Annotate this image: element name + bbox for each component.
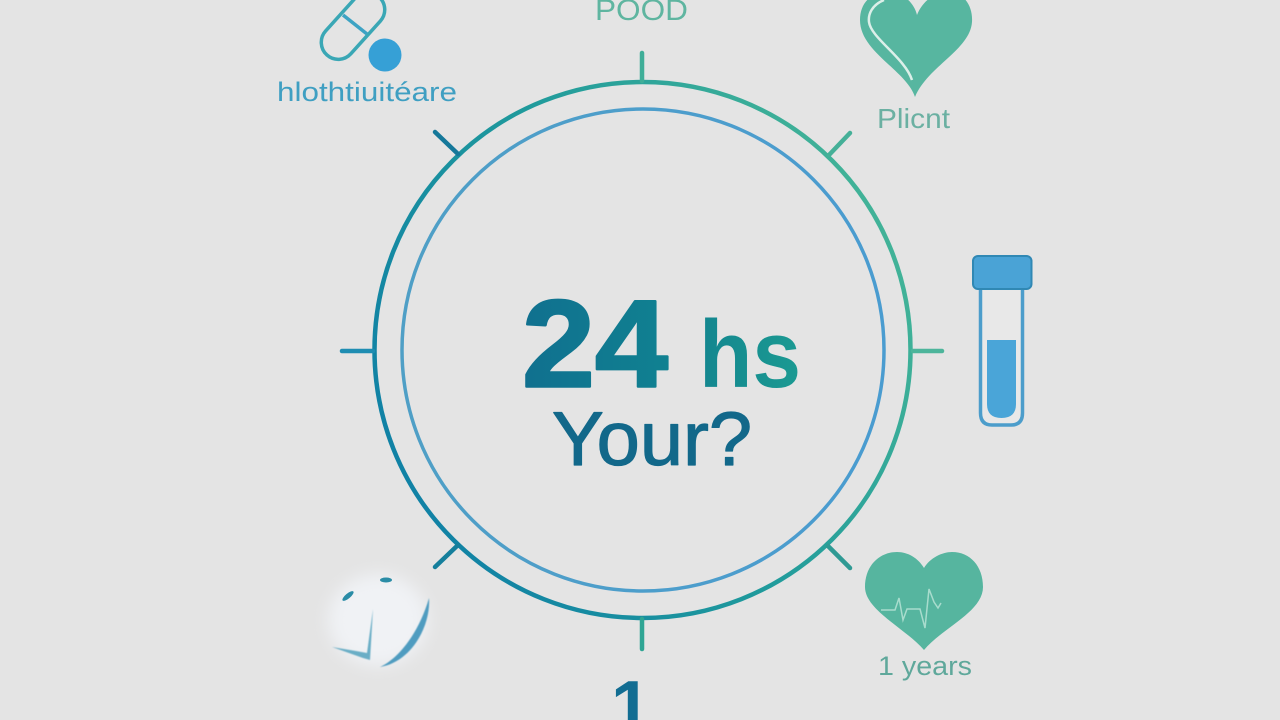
number 24: 24 [522,276,668,414]
heart [865,552,983,650]
outer ring [374,82,910,618]
liquid [987,340,1016,418]
dot marks [380,578,392,582]
central headline: 24 hs Your? [522,276,801,482]
icon: test tube [973,256,1032,425]
blue dot [368,38,402,72]
inner ring [402,109,884,591]
heart label: Plicnt [877,103,950,134]
cap [973,256,1032,289]
tube body [980,288,1022,425]
blob glow [328,574,428,666]
icon: heart with label, top right [860,0,972,134]
heart fill [860,0,972,97]
pill capsule [314,0,392,66]
heart highlight sliver [869,0,912,80]
lower wedge [332,609,373,660]
icon: heart with heartbeat and label [865,552,983,681]
panel: central clock ring [374,82,910,618]
icon: pill with label [277,0,457,107]
blue edge [380,598,429,667]
icon: white capsule blob [328,574,429,667]
unit hs: hs [699,301,801,408]
clock tick marks [342,53,942,649]
heartbeat line [881,589,941,628]
pill label: hlothtiuitéare [277,77,457,107]
heart label: 1 years [878,651,972,681]
question Your?: Your? [552,397,752,482]
